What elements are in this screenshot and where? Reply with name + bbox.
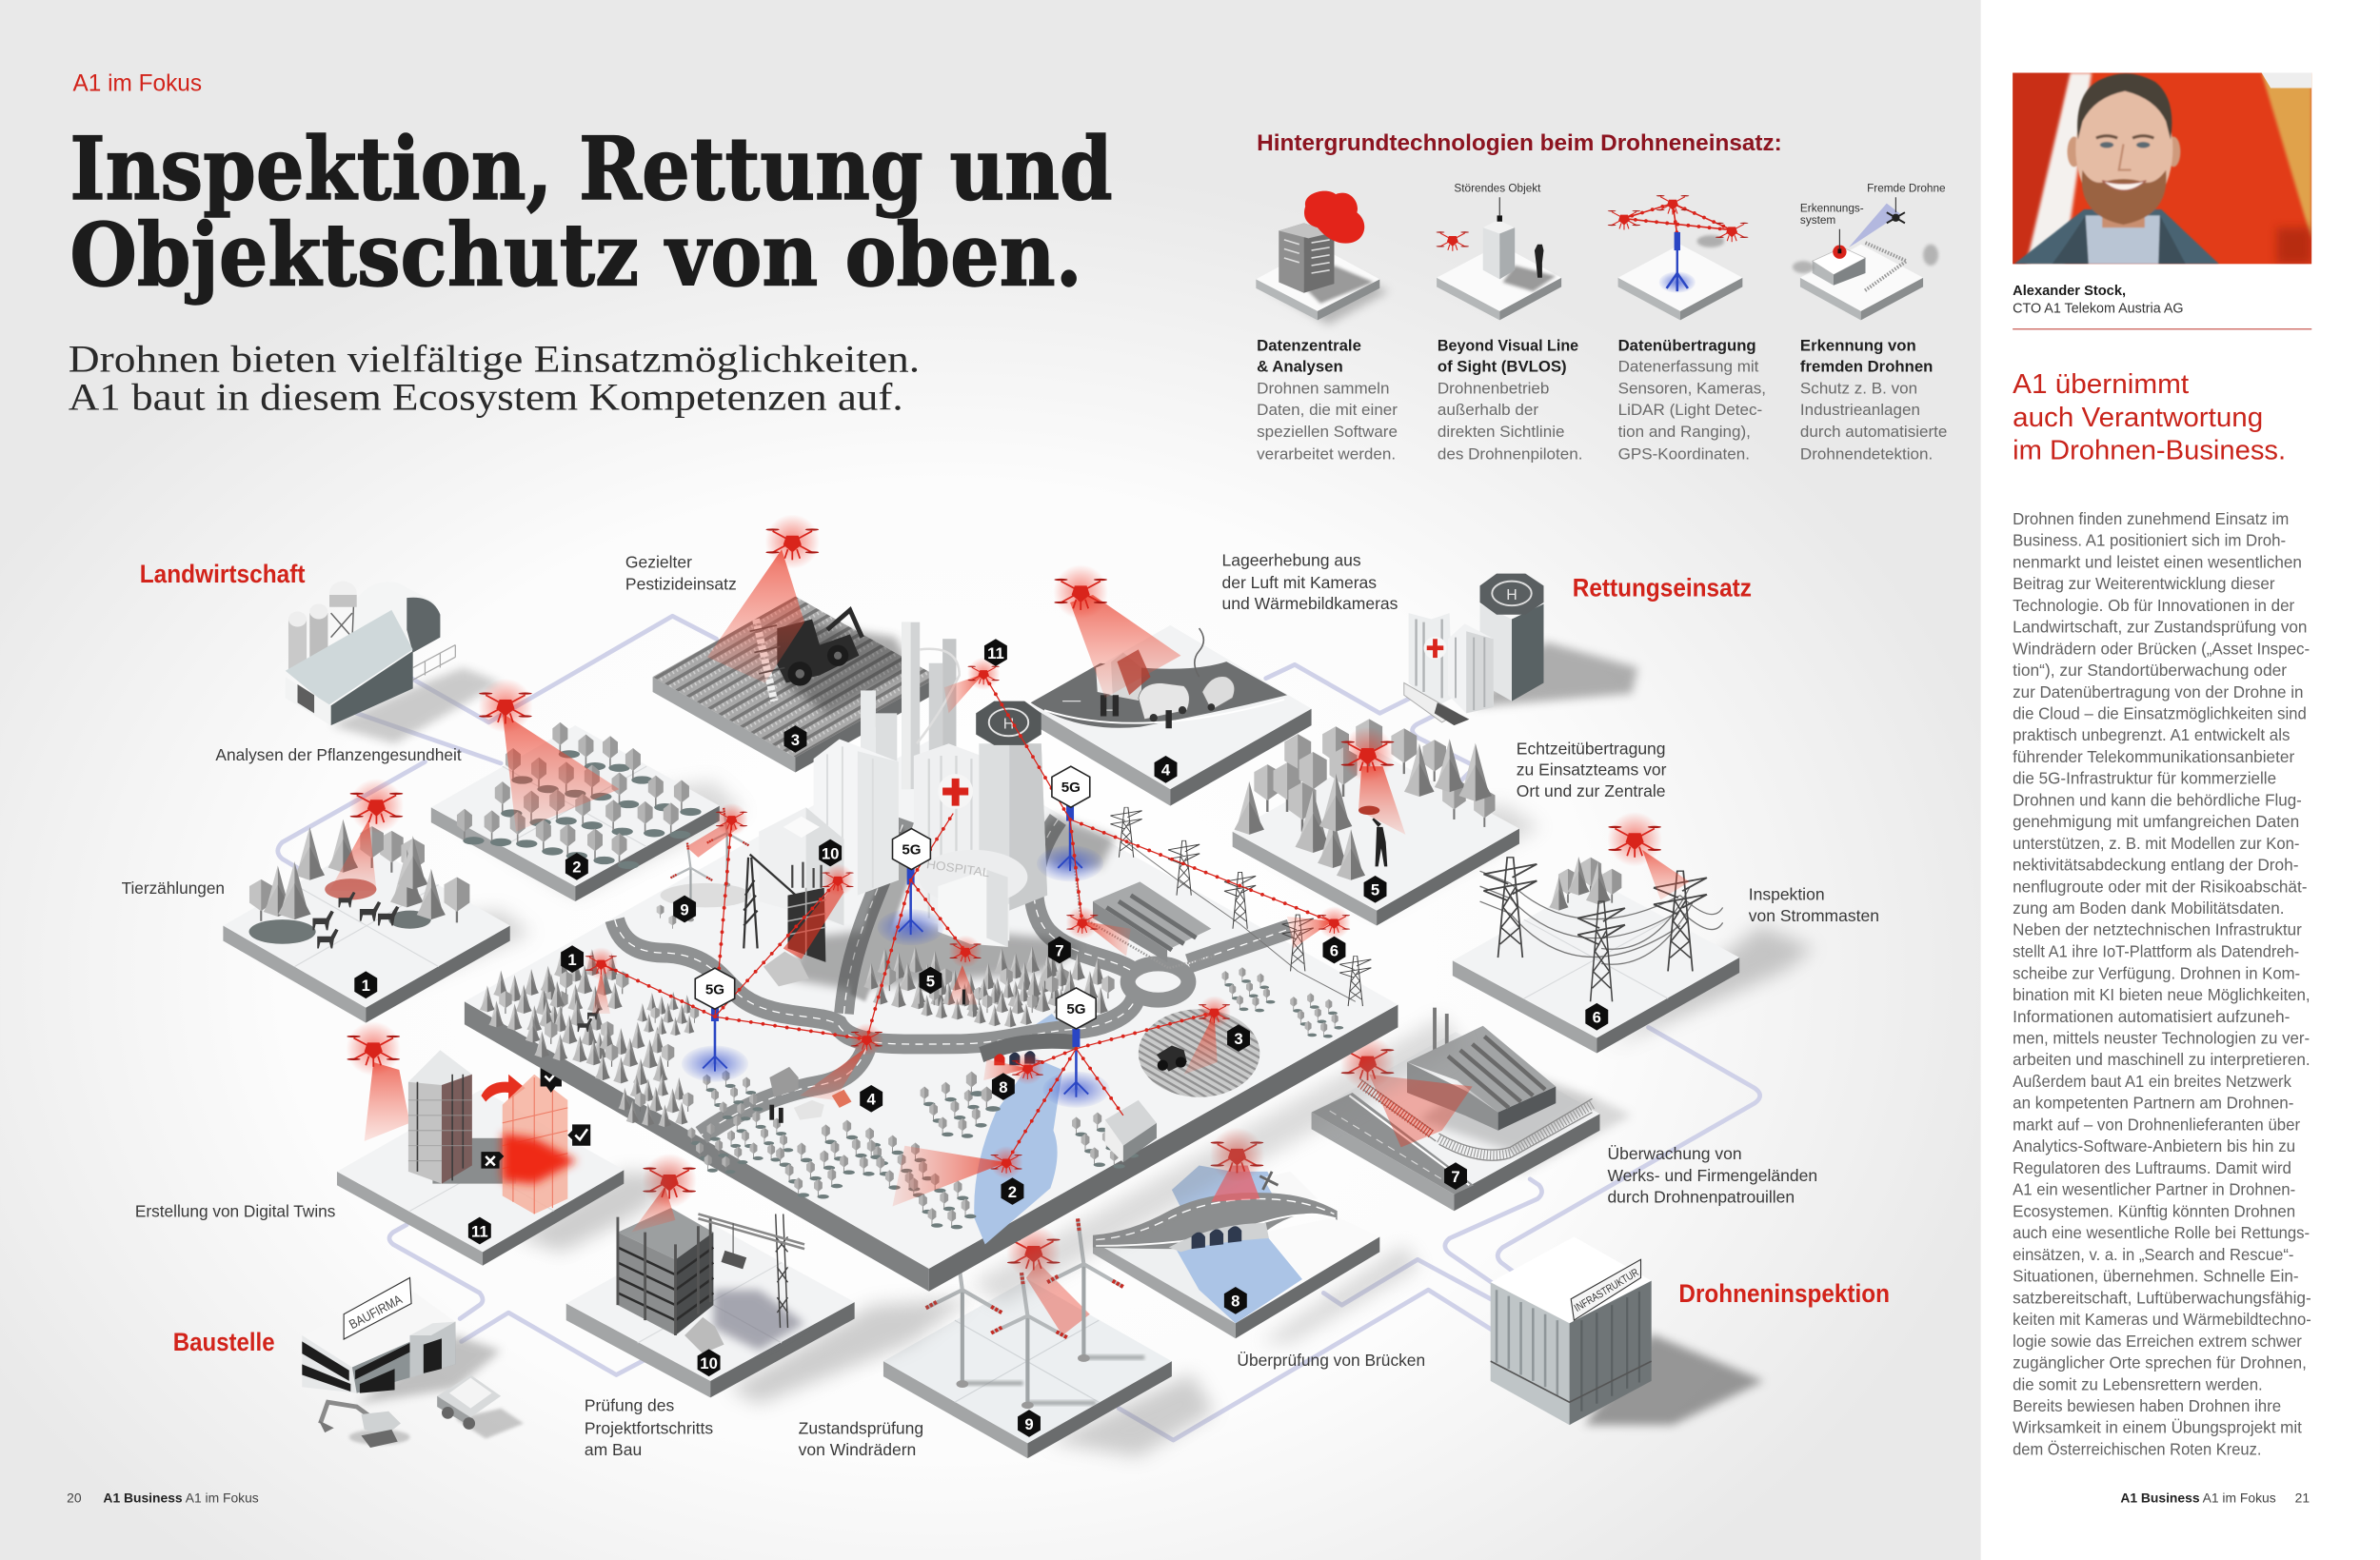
- number badges on outer tiles: 11: [471, 1222, 488, 1240]
- article body: die Cloud – die Einsatzmöglichkeiten sind: [2013, 703, 2307, 722]
- tech text: foreign drones: Erkennung von: [1800, 336, 1916, 354]
- label: plant health: Analysen der Pflanzengesundheit: [215, 745, 462, 764]
- lower trees: [776, 967, 1343, 1229]
- title: [69, 119, 1113, 306]
- label: progress: Projektfortschritts: [585, 1419, 713, 1438]
- article body: scheibe zur Verfügung. Drohnen in Kom-: [2013, 963, 2300, 982]
- tile 2: plant health: [431, 679, 744, 901]
- subtitle: A1 baut in diesem Ecosystem Kompetenzen auf.: [69, 375, 903, 418]
- number badges on outer tiles: 1: [362, 977, 370, 995]
- tech item: BVLOS: [1437, 197, 1561, 320]
- article body: die 5G-Infrastruktur für kommerzielle: [2013, 769, 2276, 788]
- cone at river bridge: [983, 1059, 1027, 1080]
- tech text: data centre: Drohnen sammeln: [1257, 380, 1389, 398]
- tile 8: bridge: [1093, 1128, 1419, 1343]
- portrait caption: CTO A1 Telekom Austria AG: [2013, 301, 2184, 316]
- tech text: data centre: verarbeitet werden.: [1257, 444, 1396, 463]
- article body: Drohnen finden zunehmend Einsatz im: [2013, 509, 2289, 528]
- label: pesticide: Gezielter: [625, 552, 692, 571]
- tech text: transmission: tion and Ranging),: [1618, 423, 1751, 441]
- tech labels small: system: [1800, 214, 1835, 227]
- building: farm: [286, 582, 501, 743]
- number badges on main map: [561, 639, 1345, 1205]
- central forest: [863, 946, 1115, 1027]
- label: pesticide: [625, 552, 737, 593]
- footer left: 20: [67, 1490, 82, 1505]
- number badges on outer tiles: 9: [1024, 1415, 1034, 1433]
- title: Objektschutz von oben.: [69, 206, 1082, 306]
- article body: men, mittels neuster Technologien zu ver-: [2013, 1028, 2310, 1047]
- tech text: BVLOS: Drohnenbetrieb: [1438, 380, 1549, 398]
- number badges on main map: 3: [1234, 1030, 1243, 1048]
- accident on main map: [769, 1047, 866, 1123]
- bridge on main map: [979, 1034, 1078, 1065]
- house on main map: [1105, 1100, 1157, 1162]
- number badges on main map: 9: [680, 900, 689, 918]
- article body: Landwirtschaft, zur Zustandsprüfung von: [2013, 618, 2307, 637]
- tech text: foreign drones: [1800, 336, 1947, 463]
- panel: right text column background: [1981, 0, 2380, 1560]
- number badges on outer tiles: 5: [1371, 881, 1379, 899]
- number badges on outer tiles: 7: [1451, 1168, 1460, 1186]
- tile 7: factory surveillance: [1312, 1008, 1632, 1211]
- wind park on main map: [657, 808, 751, 929]
- tile 6: power mast inspection: [1453, 812, 1814, 1053]
- label: factory: [1607, 1144, 1817, 1207]
- article body: Analytics-Software-Anbietern bis hin zu: [2013, 1136, 2295, 1155]
- article body: einsätzen, v. a. in „Search and Rescue“-: [2013, 1245, 2294, 1264]
- portrait caption: Alexander Stock,: [2013, 284, 2126, 299]
- article body: bination mit KI bieten neue Möglichkeiten,: [2013, 985, 2311, 1004]
- dump truck: [437, 1374, 524, 1438]
- article body: Regulatoren des Luftraums. Damit wird: [2013, 1158, 2291, 1177]
- heading: background technologies: Hintergrundtechnologien beim Drohneneinsatz:: [1257, 130, 1782, 156]
- tech text: data centre: [1257, 336, 1398, 463]
- article heading: auch Verantwortung: [2013, 403, 2263, 433]
- article body: Wirksamkeit in einem Übungsprojekt mit: [2013, 1418, 2302, 1437]
- red cross: [938, 774, 973, 809]
- tech text: foreign drones: Drohnendetektion.: [1800, 444, 1933, 463]
- tile 5: real-time transmission: [1233, 719, 1540, 926]
- number badges on main map: 5: [926, 972, 935, 990]
- tech item: detecting foreign drones: [1793, 197, 1938, 320]
- number badges on main map: 6: [1330, 941, 1339, 959]
- tech text: data centre: speziellen Software: [1257, 423, 1398, 441]
- category: construction site: Baustelle: [173, 1327, 275, 1356]
- 5G badges: 5G: [705, 981, 724, 997]
- label: progress: am Bau: [585, 1440, 642, 1459]
- number badges on main map: 10: [822, 844, 839, 862]
- article body: zung am Boden dank Mobilitätsdaten.: [2013, 898, 2285, 918]
- label: wind turbines: Zustandsprüfung: [799, 1419, 923, 1438]
- label: factory: durch Drohnenpatrouillen: [1607, 1188, 1795, 1207]
- label: real-time: [1517, 739, 1667, 800]
- tech item: data centre: [1256, 191, 1389, 325]
- article body: nenflugroute oder mit der Risikoabschät-: [2013, 877, 2308, 896]
- article body: an kompetenten Partnern am Drohnen-: [2013, 1094, 2294, 1113]
- tech text: foreign drones: Schutz z. B. von: [1800, 380, 1917, 398]
- article body: genehmigung mit umfangreichen Daten: [2013, 812, 2299, 831]
- label: real-time: Echtzeitübertragung: [1517, 739, 1666, 758]
- tech text: data centre: & Analysen: [1257, 358, 1343, 376]
- tech text: BVLOS: [1438, 336, 1582, 463]
- tech text: foreign drones: Industrieanlagen: [1800, 401, 1920, 419]
- label: progress: Prüfung des: [585, 1396, 675, 1415]
- label: bridges: Überprüfung von Brücken: [1237, 1351, 1425, 1370]
- subtitle: Drohnen bieten vielfältige Einsatzmöglichkeiten.: [69, 338, 920, 381]
- label: power masts: von Strommasten: [1749, 906, 1879, 925]
- cone at pylons: [1287, 917, 1333, 948]
- portrait caption: [2013, 284, 2184, 316]
- cone at helipad tower: [944, 674, 983, 713]
- label: animal count: Tierzählungen: [122, 879, 225, 898]
- label: aerial survey: der Luft mit Kameras: [1221, 573, 1377, 592]
- portrait photo: [2013, 73, 2311, 264]
- tech text: BVLOS: direkten Sichtlinie: [1438, 423, 1564, 441]
- tile 1: animal counting: [223, 779, 531, 1023]
- article body: Business. A1 positioniert sich im Droh-: [2013, 531, 2286, 550]
- number badges on main map: 11: [987, 644, 1004, 662]
- building: construction company: [302, 1277, 501, 1404]
- number badges on outer tiles: 6: [1593, 1009, 1601, 1027]
- label: real-time: zu Einsatzteams vor: [1517, 760, 1667, 780]
- article body: markt auf – von Drohnenlieferanten über: [2013, 1115, 2300, 1134]
- article heading: im Drohnen-Business.: [2013, 435, 2286, 465]
- building: infrastructure: INFRASTRUKTUR: [1573, 1267, 1641, 1314]
- label: wind turbines: von Windrädern: [799, 1440, 916, 1459]
- article body: Windrädern oder Brücken („Asset Inspec-: [2013, 639, 2310, 658]
- label: aerial survey: Lageerhebung aus: [1221, 551, 1361, 570]
- tech text: transmission: Datenübertragung: [1618, 336, 1756, 354]
- roads: [615, 819, 1290, 1135]
- article heading: A1 übernimmt: [2013, 369, 2189, 400]
- footer right: A1 Business A1 im Fokus: [2120, 1490, 2276, 1505]
- tech text: BVLOS: Beyond Visual Line: [1438, 336, 1578, 354]
- drones on main map: [585, 658, 1351, 1178]
- label: progress: [585, 1396, 713, 1459]
- hospital building: H: [1506, 587, 1517, 603]
- label: power masts: Inspektion: [1749, 884, 1825, 903]
- tile 10: construction: [566, 1154, 971, 1404]
- label: factory: Überwachung von: [1607, 1144, 1742, 1163]
- article body: A1 ein wesentlicher Partner in Drohnen-: [2013, 1180, 2295, 1199]
- article body: Außerdem baut A1 ein breites Netzwerk: [2013, 1072, 2291, 1091]
- red data links: [601, 674, 1334, 1162]
- title: Inspektion, Rettung und: [69, 119, 1113, 220]
- excavator: [319, 1402, 409, 1448]
- article body: logie sowie das Erreichen extrem schwer: [2013, 1332, 2302, 1351]
- 5G badges: 5G: [1061, 780, 1081, 796]
- connection lines: [278, 616, 1760, 1440]
- tractor on main map: [1157, 1014, 1218, 1075]
- left forest: [480, 949, 793, 1174]
- tech labels small: [1454, 183, 1946, 227]
- skyscraper group: HOSPITAL: [925, 857, 991, 879]
- tech text: transmission: GPS-Koordinaten.: [1618, 444, 1750, 463]
- label: aerial survey: [1221, 551, 1398, 613]
- label: wind turbines: [799, 1419, 923, 1459]
- number badges on outer tiles: 4: [1161, 761, 1171, 780]
- article body: zugänglicher Orte sprechen für Drohnen,: [2013, 1353, 2307, 1372]
- footer left: A1 Business A1 im Fokus: [103, 1490, 259, 1505]
- article body: Informationen automatisiert aufzuneh-: [2013, 1007, 2291, 1026]
- number badges on main map: 1: [567, 951, 577, 969]
- number badges on main map: 7: [1055, 941, 1064, 959]
- helipad: [976, 701, 1041, 745]
- article body: Beitrag zur Weiterentwicklung dieser: [2013, 574, 2275, 593]
- number badges on main map: 8: [999, 1078, 1008, 1096]
- article body: die somit zu Lebensrettern werden.: [2013, 1374, 2263, 1393]
- hospital building: [1404, 574, 1637, 725]
- number badges on outer tiles: 2: [572, 859, 582, 877]
- article body: zur Datenübertragung von der Drohne in: [2013, 682, 2303, 701]
- tech text: transmission: [1618, 336, 1766, 463]
- number badges on main map: 4: [867, 1091, 877, 1109]
- number badges on main map: 2: [1008, 1183, 1017, 1201]
- tech text: transmission: LiDAR (Light Detec-: [1618, 401, 1762, 419]
- river: [974, 1014, 1062, 1244]
- tech labels small: Erkennungs-: [1800, 202, 1864, 214]
- tech labels small: Störendes Objekt: [1454, 183, 1541, 195]
- tech text: transmission: Datenerfassung mit: [1618, 358, 1759, 376]
- tile 9: wind turbines: [883, 1218, 1215, 1458]
- tech text: foreign drones: durch automatisierte: [1800, 423, 1947, 441]
- article body: keiten mit Kameras und Wärmebildtechno-: [2013, 1310, 2311, 1329]
- tech text: BVLOS: außerhalb der: [1438, 401, 1538, 419]
- 5G badges: 5G: [1066, 1001, 1086, 1017]
- article heading: [2013, 369, 2286, 465]
- category: agriculture: Landwirtschaft: [140, 559, 305, 588]
- construction block on main map: [744, 807, 843, 986]
- article body: dem Österreichischen Roten Kreuz.: [2013, 1440, 2261, 1459]
- tech text: data centre: Datenzentrale: [1257, 336, 1361, 354]
- helipad: H: [1003, 716, 1014, 732]
- 5G badges: 5G: [902, 842, 922, 859]
- article body: Technologie. Ob für Innovationen in der: [2013, 596, 2294, 615]
- article body: satzbereitschaft, Luftüberwachungsfähig-: [2013, 1288, 2311, 1307]
- number badges on outer tiles: [354, 725, 1608, 1437]
- article body: unterstützen, z. B. mit Modellen zur Kon-: [2013, 834, 2300, 853]
- building: infrastructure: [1491, 1236, 1764, 1425]
- number badges on outer tiles: 10: [700, 1354, 718, 1372]
- tile 3: pesticide field: [653, 514, 938, 773]
- article body: nenmarkt und leistet einen wesentlichen: [2013, 552, 2302, 571]
- category: rescue: Rettungseinsatz: [1573, 573, 1752, 602]
- article body: nektivitätsabdeckung entlang der Droh-: [2013, 856, 2299, 875]
- tech text: data centre: Daten, die mit einer: [1257, 401, 1398, 419]
- label: aerial survey: und Wärmebildkameras: [1221, 594, 1398, 613]
- large building shadow: [789, 817, 1116, 1001]
- footer right: 21: [2295, 1490, 2310, 1505]
- tile 4: situational assessment: [1029, 564, 1312, 806]
- number badges on outer tiles: 8: [1231, 1293, 1240, 1311]
- tech text: BVLOS: des Drohnenpiloten.: [1438, 444, 1582, 463]
- main platform: [465, 622, 1465, 1305]
- substation with power lines: [1075, 807, 1371, 1006]
- article body: Situationen, übernehmen. Schnelle Ein-: [2013, 1267, 2299, 1286]
- label: pesticide: Pestizideinsatz: [625, 574, 737, 593]
- tile 11: digital twins: [337, 1021, 683, 1266]
- caption rule: [2013, 328, 2311, 329]
- label: real-time: Ort und zur Zentrale: [1517, 781, 1666, 800]
- article body: Ecosystemen. Künftig könnten Drohnen: [2013, 1201, 2295, 1220]
- category: drone inspection: Drohneninspektion: [1678, 1278, 1890, 1308]
- striped field: [1139, 1009, 1259, 1097]
- label: digital twins: Erstellung von Digital Twins: [135, 1202, 336, 1221]
- tech text: foreign drones: fremden Drohnen: [1800, 358, 1933, 376]
- article body: führender Telekommunikationsanbieter: [2013, 747, 2294, 766]
- article body: praktisch unbegrenzt. A1 entwickelt als: [2013, 725, 2291, 744]
- label: factory: Werks- und Firmengeländen: [1607, 1166, 1817, 1185]
- article body: auch eine wesentliche Rolle bei Rettungs-: [2013, 1223, 2310, 1242]
- article body: [2013, 509, 2311, 1459]
- article body: Neben der netztechnischen Infrastruktur: [2013, 920, 2302, 939]
- article body: Bereits bewiesen haben Drohnen ihre: [2013, 1396, 2281, 1415]
- tech text: BVLOS: of Sight (BVLOS): [1438, 358, 1567, 376]
- skyscraper group: [814, 622, 1047, 947]
- tech labels small: Fremde Drohne: [1867, 183, 1946, 195]
- tech item: data transmission: [1608, 195, 1748, 320]
- building: construction company: BAUFIRMA: [347, 1292, 405, 1332]
- number badges on outer tiles: 3: [791, 731, 800, 749]
- tech text: transmission: Sensoren, Kameras,: [1618, 380, 1766, 398]
- subtitle: [69, 338, 920, 418]
- article body: Drohnen und kann die behördliche Flug-: [2013, 790, 2302, 809]
- label: power masts: [1749, 884, 1879, 925]
- cone at substation: [1082, 921, 1131, 956]
- section label: A1 im Fokus: [73, 71, 202, 97]
- article body: tion“), zur Standortüberwachung oder: [2013, 661, 2287, 680]
- blue transmission towers: [682, 794, 1109, 1108]
- article body: stellt A1 ihre IoT-Plattform als Datendreh-: [2013, 942, 2299, 961]
- 5G badges: [695, 766, 1096, 1029]
- article body: arbeiten und maschinell zu interpretieren.: [2013, 1050, 2311, 1069]
